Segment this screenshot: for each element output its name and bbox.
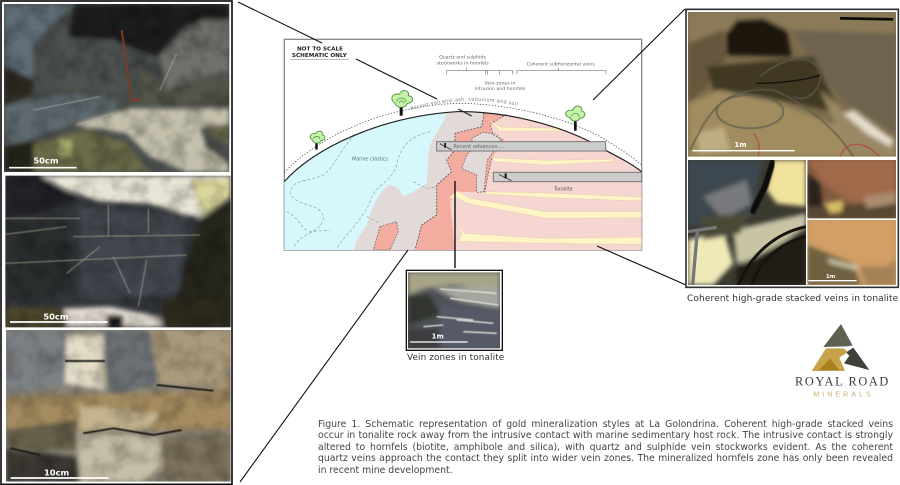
label: stockworks bracket: stockworks in hornfels — [437, 60, 489, 66]
tunnel: recent advances: Recent advances.... — [453, 144, 504, 150]
label: vein-zones bracket: intrusion and hornfels — [475, 86, 526, 92]
note: not to scale: NOT TO SCALE — [297, 46, 343, 52]
icon: mountain — [812, 324, 869, 371]
scale bar: 10cm: 10cm — [44, 467, 70, 477]
label: stockworks bracket: Quartz and sulphide — [439, 54, 486, 60]
label: stockworks bracket — [437, 54, 489, 74]
photo: stacked veins with hammer — [688, 160, 806, 285]
hornfels inlier — [462, 132, 502, 192]
label: vein-zones bracket: Vein-zones in — [485, 80, 515, 86]
scale bar: 1m: 1m — [734, 141, 746, 149]
label: tonalite: Tonalite — [553, 187, 573, 193]
caption: vein zones: Vein zones in tonalite — [407, 353, 504, 363]
altered pod — [373, 222, 398, 250]
wordmark: minerals: MINERALS — [813, 392, 871, 399]
logo: Royal Road Minerals — [795, 324, 888, 399]
panel: right photo group — [686, 9, 898, 287]
figure caption: occur in tonalite rock away from the intrusive contact with marine sedimentary host rock. The intrusive contact is strongly — [318, 430, 893, 441]
hornfels — [354, 113, 484, 250]
tree — [310, 131, 325, 150]
panel: left photo column — [1, 1, 232, 484]
marine clastics — [284, 113, 447, 250]
scale bar: 50cm: 50cm — [43, 312, 69, 322]
scale bar: 1m: 1m — [432, 333, 444, 341]
wordmark: ROYAL ROAD — [795, 375, 888, 389]
dashed contours — [287, 132, 437, 250]
figure caption: altered to hornfels (biotite, amphibole and silica), with quartz and sulphide vein stockworks evident. As the coherent — [318, 442, 893, 452]
scale bar: 1m: 1m — [826, 274, 836, 280]
scale bar: 50cm: 50cm — [33, 156, 59, 166]
caption: stacked veins: Coherent high-grade stacked veins in tonalite — [687, 294, 898, 304]
scale bar: 1m — [808, 274, 857, 281]
leader lines — [238, 2, 686, 482]
stacked veins — [448, 121, 642, 244]
scale bar: 50cm — [9, 156, 77, 168]
ground surface — [284, 112, 642, 182]
icon: hammer — [688, 227, 717, 285]
altered zone — [415, 113, 507, 250]
photo: vein zones — [408, 272, 500, 348]
icon: hammer — [122, 30, 141, 102]
panel: schematic cross-section — [284, 38, 642, 251]
tree — [392, 91, 413, 116]
figure caption: in recent mine development. — [318, 464, 453, 476]
tunnel: recent advances — [437, 142, 606, 151]
photo: tan tunnel wall — [807, 220, 896, 285]
panel: vein zones photo — [406, 270, 502, 350]
note: not to scale: SCHEMATIC ONLY — [292, 53, 348, 59]
tonalite — [415, 113, 642, 250]
figure caption: Figure 1. Schematic representation of gold mineralization styles at La Golondrina. Coherent high-grade stacked veins — [318, 418, 893, 430]
photo: vein floor with hammer — [4, 4, 229, 172]
photo: orange tunnel wall — [807, 160, 896, 218]
tree — [566, 106, 585, 131]
photo: stockwork veins — [5, 176, 231, 327]
cover boundary — [284, 103, 642, 172]
label: coherent veins bracket — [517, 61, 606, 74]
note: not to scale — [290, 46, 349, 60]
label: coherent veins bracket: Coherent subhorizontal veins — [527, 61, 595, 67]
photo: hornfels contact — [6, 330, 231, 482]
scale bar: 1m — [692, 141, 795, 151]
label: marine clastics: Marine clastics — [352, 157, 388, 163]
scale bar: 10cm — [11, 467, 109, 478]
figure caption — [318, 418, 893, 476]
label: vein-zones bracket — [475, 71, 526, 92]
label: cover: Recent volcanic ash, colluvium and soil — [410, 97, 518, 110]
tunnel: lower drift — [493, 172, 642, 182]
scale bar: 50cm — [10, 312, 108, 322]
figure caption: quartz veins approach the contact they split into wider vein zones. The mineralized hornfels zone has only been revealed — [318, 453, 893, 464]
photo: tunnel — [688, 12, 896, 157]
